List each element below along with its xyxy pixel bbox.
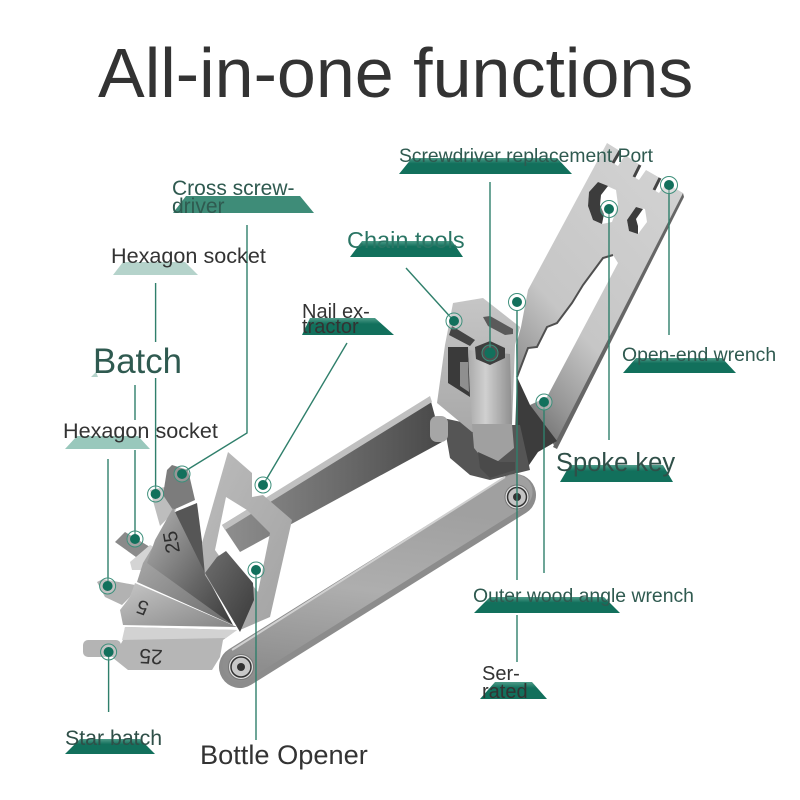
bottle opener (202, 452, 292, 630)
chain tool body (437, 298, 520, 432)
label: outer wood angle wrench: Outer wood angle wrench (473, 585, 694, 607)
jaw notch (449, 326, 475, 346)
thread (460, 362, 469, 392)
dot: batch (127, 531, 143, 547)
label: screwdriver replacement port: Screwdriver replacement Port (399, 146, 654, 167)
dot: open-end wrench (660, 176, 678, 194)
cylinder (468, 350, 512, 424)
dot: star batch (101, 644, 117, 660)
cross bit tip (163, 465, 195, 510)
banner: serrated (480, 682, 547, 699)
label: bottle opener: Bottle Opener (200, 739, 368, 770)
banner: cross screwdriver (173, 196, 314, 213)
spoke key plate (516, 143, 683, 447)
arm top bevel (222, 396, 432, 530)
cross bit neck (150, 487, 176, 526)
label banners (65, 158, 736, 754)
banner: hexagon socket upper (113, 262, 198, 275)
joint roller (430, 416, 448, 442)
dark bit side (175, 503, 207, 580)
pivot screw upper (505, 485, 529, 509)
label: spoke key: Spoke key (556, 449, 675, 477)
label: nail extractor: Nail ex- (302, 301, 370, 323)
slot edge (517, 255, 613, 377)
top slot (483, 316, 513, 335)
plate dark base (514, 377, 557, 468)
banner: chain tools (350, 241, 463, 257)
label: chain tools: Chain tools (347, 227, 465, 253)
hex tip lower (97, 579, 135, 605)
label: open-end wrench: Open-end wrench (622, 344, 776, 366)
notch shadows (613, 151, 660, 190)
number 25: 25 (139, 644, 163, 668)
hex tip upper (115, 532, 150, 562)
label: cross screwdriver: Cross screw- (172, 177, 295, 200)
plate edge (553, 193, 684, 449)
title: All-in-one functions (98, 34, 693, 112)
label: cross screwdriver: driver (172, 195, 225, 218)
chain tool window (448, 347, 470, 397)
joint shadow piece (478, 452, 515, 478)
hex neck (130, 545, 160, 570)
dot: hexagon socket upper (148, 486, 164, 502)
leaf bevel (122, 627, 237, 640)
dark leaf (205, 551, 254, 632)
dot: nail extractor (255, 477, 271, 493)
tool illustration (83, 143, 684, 680)
lower arm highlight (232, 477, 505, 650)
number 5: 5 (134, 594, 152, 619)
banner: open-end wrench (623, 358, 736, 373)
banner: outer wood angle wrench (474, 597, 620, 613)
leaf labelled 25 lower (113, 627, 237, 670)
dot: hexagon socket lower (100, 578, 116, 594)
leader lines (108, 182, 669, 740)
lower arm face (240, 492, 515, 664)
leaf labelled 5 (120, 583, 237, 627)
joint highlight (472, 424, 514, 462)
label: hexagon socket lower: Hexagon socket (63, 418, 218, 443)
label: nail extractor: tractor (302, 316, 359, 338)
hex socket (475, 341, 505, 365)
small socket wall (627, 207, 643, 234)
dot: screwdriver port (482, 345, 498, 361)
label: serrated: rated (482, 681, 528, 703)
banner: nail extractor (302, 318, 394, 335)
upper dark arm (222, 398, 442, 552)
lower pivot screw (228, 654, 254, 680)
number on leaf: 25 (159, 529, 185, 555)
leaf middle (137, 535, 233, 625)
star bit tip (83, 640, 121, 657)
lower arm (240, 495, 515, 667)
callout dots (100, 176, 678, 660)
joint bracket (443, 418, 530, 480)
label: serrated: Ser- (482, 663, 520, 685)
dot: serrated (508, 294, 526, 310)
banner: batch mark (91, 372, 98, 377)
leaf labelled 25 (147, 508, 233, 625)
banner: hexagon socket lower (65, 436, 150, 449)
banner: screwdriver port (399, 158, 572, 174)
banner: spoke key (560, 465, 673, 482)
dot: outer wood angle wrench (536, 394, 552, 410)
label: hexagon socket upper: Hexagon socket (111, 243, 266, 268)
socket wall (588, 182, 608, 224)
dot: cross screwdriver (174, 466, 190, 482)
dot: chain tools (446, 313, 462, 329)
banner: star batch (65, 739, 155, 754)
label: batch: Batch (93, 342, 182, 381)
dot: spoke key (600, 200, 618, 218)
label: star batch: Star batch (65, 726, 162, 750)
dot: bottle opener (248, 562, 264, 578)
